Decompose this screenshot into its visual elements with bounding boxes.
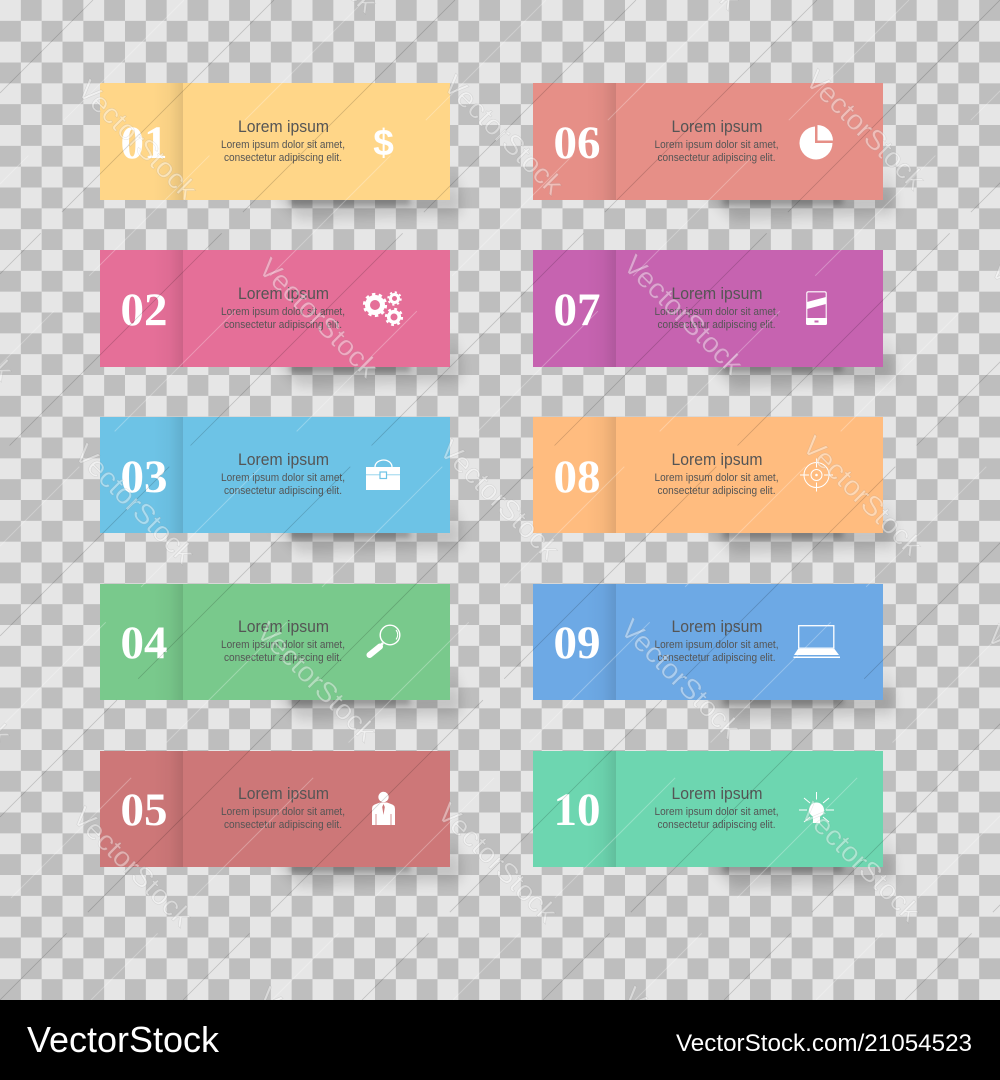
description 05	[221, 806, 345, 831]
card 05	[100, 751, 450, 867]
watermark text: VectorStock	[253, 252, 385, 384]
number 04: 04	[120, 617, 168, 669]
icon: briefcase	[366, 460, 400, 490]
icon: dollar: $	[373, 122, 394, 163]
watermark text: VectorStock	[615, 613, 747, 745]
description 07	[654, 306, 778, 331]
card 10	[533, 751, 883, 867]
description 09: Lorem ipsum dolor sit amet,	[654, 639, 778, 651]
number 07: 07	[554, 284, 600, 336]
description 09: consectetur adipiscing elit.	[658, 652, 776, 664]
number 01: 01	[120, 117, 168, 169]
description 05: consectetur adipiscing elit.	[224, 819, 342, 831]
description 09	[654, 639, 778, 664]
card 02	[100, 250, 450, 367]
description 01: Lorem ipsum dolor sit amet,	[221, 139, 345, 151]
number 10: 10	[554, 784, 600, 836]
description 04: consectetur adipiscing elit.	[224, 652, 342, 664]
icon: gears	[364, 292, 402, 325]
card 03	[100, 417, 450, 533]
icon: target	[800, 458, 833, 492]
watermark text: VectorStock	[251, 616, 383, 748]
description 02: Lorem ipsum dolor sit amet,	[221, 306, 345, 318]
heading 02: Lorem ipsum	[238, 285, 329, 303]
description 10: consectetur adipiscing elit.	[658, 819, 776, 831]
description 03: consectetur adipiscing elit.	[224, 485, 342, 497]
heading 01: Lorem ipsum	[238, 118, 329, 136]
watermark text: VectorStock	[69, 438, 201, 570]
description 08: consectetur adipiscing elit.	[658, 485, 776, 497]
footer image id: VectorStock.com/21054523	[676, 1030, 972, 1057]
description 01: consectetur adipiscing elit.	[224, 152, 342, 164]
card 06	[533, 83, 883, 200]
card 08	[533, 417, 883, 533]
description 04: Lorem ipsum dolor sit amet,	[221, 639, 345, 651]
heading 07: Lorem ipsum	[672, 285, 762, 303]
watermark text: VectorStock	[434, 434, 566, 566]
heading 10: Lorem ipsum	[672, 785, 762, 803]
description 03: Lorem ipsum dolor sit amet,	[221, 472, 345, 484]
watermark text: VectorStock	[800, 64, 932, 196]
icon: pie chart	[800, 125, 833, 159]
description 02: consectetur adipiscing elit.	[224, 319, 342, 331]
description 07: Lorem ipsum dolor sit amet,	[654, 306, 778, 318]
watermark text: VectorStock	[795, 796, 927, 928]
card 09	[533, 584, 883, 700]
card shadows	[270, 165, 894, 887]
card 07	[533, 250, 883, 367]
heading 08: Lorem ipsum	[672, 451, 762, 469]
watermark text: VectorStock	[438, 69, 570, 201]
description 03	[221, 472, 345, 497]
footer logo: VectorStock	[27, 1019, 220, 1060]
watermark text: VectorStock	[432, 797, 564, 929]
icon: light bulb	[799, 792, 834, 823]
footer bar	[0, 1000, 1000, 1080]
description 06: consectetur adipiscing elit.	[658, 152, 776, 164]
number 09: 09	[554, 617, 600, 669]
number 05: 05	[120, 784, 168, 836]
description 07: consectetur adipiscing elit.	[658, 319, 776, 331]
watermark text: VectorStock	[797, 430, 929, 562]
watermark text: VectorStock	[67, 801, 199, 933]
description 05: Lorem ipsum dolor sit amet,	[221, 806, 345, 818]
number 08: 08	[554, 451, 600, 503]
description 01	[221, 139, 345, 164]
card 01	[100, 83, 450, 200]
card 04	[100, 584, 450, 700]
description 06	[654, 139, 778, 164]
description 06: Lorem ipsum dolor sit amet,	[654, 139, 778, 151]
heading 05: Lorem ipsum	[238, 785, 329, 803]
number 02: 02	[120, 284, 168, 336]
description 08	[654, 472, 778, 497]
heading 04: Lorem ipsum	[238, 618, 329, 636]
watermark text: VectorStock	[72, 74, 204, 206]
number 06: 06	[554, 117, 600, 169]
icon: smartphone	[806, 292, 827, 325]
number 03: 03	[120, 451, 168, 503]
description 08: Lorem ipsum dolor sit amet,	[654, 472, 778, 484]
description 04	[221, 639, 345, 664]
description 02	[221, 306, 345, 331]
description 10: Lorem ipsum dolor sit amet,	[654, 806, 778, 818]
icon: magnifier	[370, 625, 400, 655]
icon: businessman	[372, 792, 395, 825]
heading 09: Lorem ipsum	[672, 618, 762, 636]
heading 06: Lorem ipsum	[672, 118, 762, 136]
heading 03: Lorem ipsum	[238, 451, 329, 469]
description 10	[654, 806, 778, 831]
watermark text: VectorStock	[618, 249, 750, 381]
icon: laptop	[794, 626, 840, 658]
